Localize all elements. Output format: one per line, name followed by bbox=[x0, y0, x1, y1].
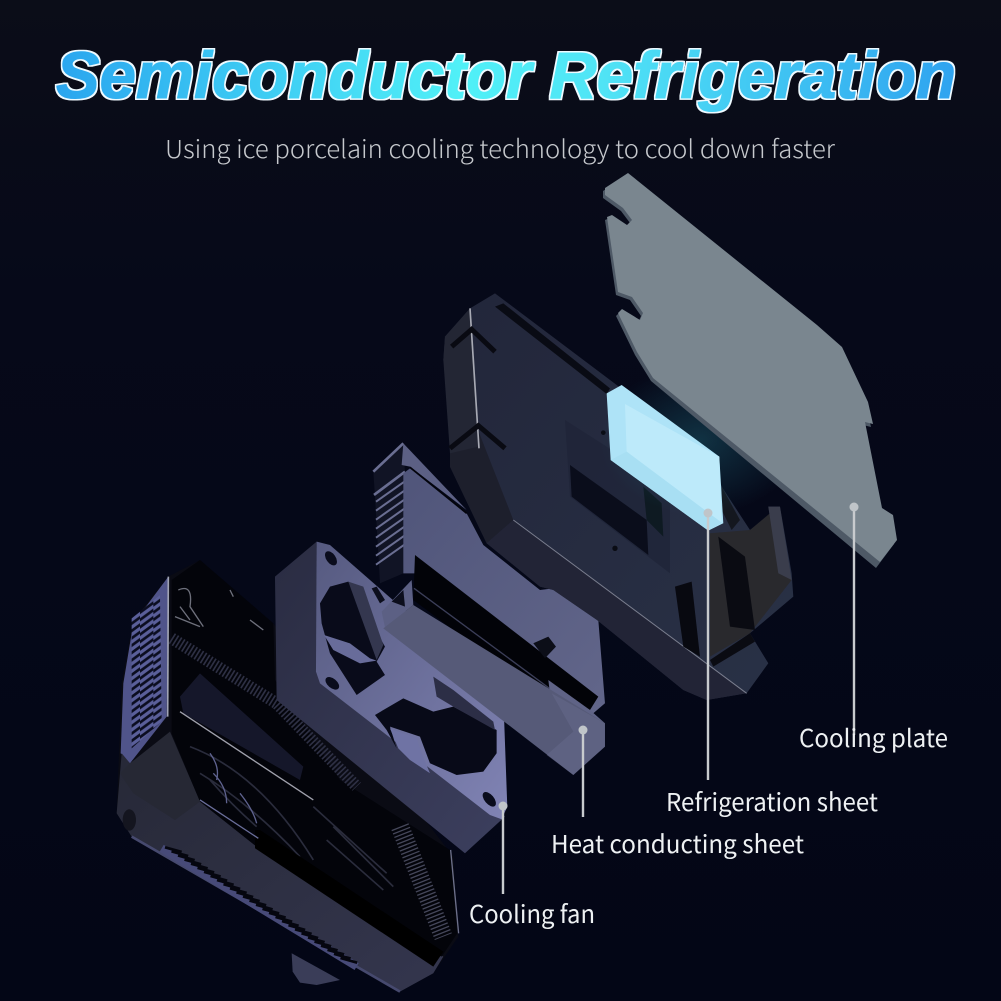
label: refrigeration sheet: Refrigeration sheet bbox=[666, 784, 878, 819]
leader line: refrigeration sheet bbox=[704, 508, 712, 780]
glow behind refrigeration sheet bbox=[600, 365, 800, 515]
label: heat conducting sheet: Heat conducting sheet bbox=[551, 826, 804, 861]
label: cooling plate: Cooling plate bbox=[799, 720, 948, 755]
label: cooling fan: Cooling fan bbox=[469, 896, 595, 931]
component: refrigeration sheet bbox=[607, 385, 723, 531]
component: outer case bbox=[117, 560, 459, 992]
leader line: heat conducting sheet bbox=[578, 726, 588, 817]
leader line: cooling plate bbox=[850, 502, 858, 735]
component: cooling fan bbox=[275, 542, 507, 853]
leader line: cooling fan bbox=[498, 802, 508, 894]
component: cooling plate bbox=[603, 173, 897, 568]
component: refrigeration housing bbox=[443, 293, 793, 700]
component: heat conducting sheet bbox=[372, 443, 605, 775]
subtitle: Using ice porcelain cooling technology to cool down faster bbox=[165, 130, 836, 166]
title: Semiconductor Refrigeration bbox=[56, 38, 956, 112]
